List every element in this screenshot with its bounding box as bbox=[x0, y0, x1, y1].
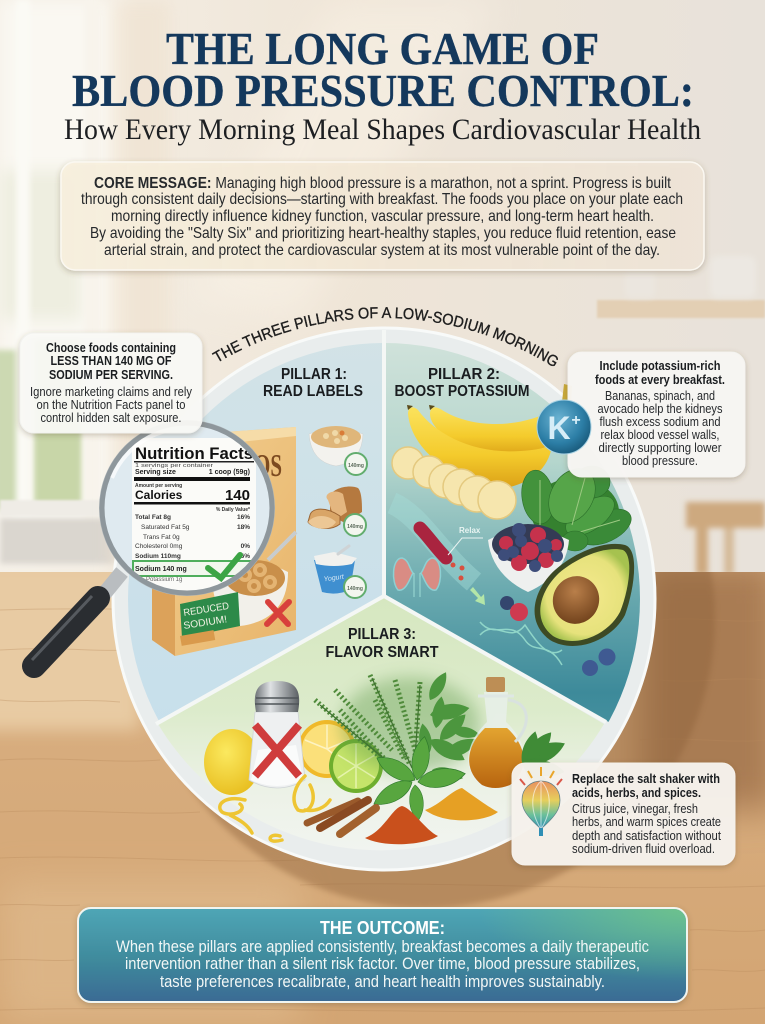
pillar 1 heading: READ LABELS bbox=[263, 383, 363, 400]
nutrition facts label: 1 servings per container bbox=[135, 463, 213, 469]
callout: flavor smart: herbs, and warm spices create bbox=[572, 815, 721, 829]
nutrition facts label: 16% bbox=[237, 514, 250, 521]
food: lemon bbox=[204, 729, 260, 795]
pillar 2 heading bbox=[394, 366, 530, 400]
food: berry bowl bbox=[488, 523, 569, 592]
callout: boost potassium: foods at every breakfast. bbox=[595, 373, 725, 387]
nutrition facts label: 0% bbox=[241, 543, 250, 550]
food: yogurt cup bbox=[314, 546, 357, 594]
pillar 1 heading bbox=[263, 366, 363, 400]
callout: read labels: control hidden salt exposure. bbox=[40, 411, 182, 425]
title bbox=[72, 23, 694, 116]
callout: read labels: LESS THAN 140 MG OF bbox=[50, 354, 172, 368]
nutrition facts label: Amount per serving bbox=[135, 483, 182, 489]
nutrition facts label: Calories bbox=[135, 488, 183, 502]
callout: boost potassium bbox=[568, 352, 745, 477]
nutrition facts label: Nutrition Facts bbox=[135, 445, 253, 463]
callout: read labels: Choose foods containing bbox=[46, 341, 176, 355]
nutrition facts label: 140 bbox=[225, 487, 250, 504]
food: lemon peel curls bbox=[220, 776, 330, 841]
food: bread loaf bbox=[308, 486, 362, 529]
outcome text bbox=[116, 938, 649, 991]
callout: flavor smart: Replace the salt shaker with bbox=[572, 772, 720, 786]
callout: read labels bbox=[20, 333, 202, 433]
shelf bbox=[597, 300, 765, 318]
panel: core message: CORE MESSAGE: Managing high blood pressure is a marathon, not a sprint. Progress is built bbox=[94, 175, 671, 192]
nutrition facts label: 6% bbox=[241, 553, 250, 560]
food: fresh herbs bbox=[315, 669, 480, 821]
food: lemon slice bbox=[298, 720, 356, 778]
pillar 3 heading: PILLAR 3: bbox=[348, 626, 416, 643]
food: lime bbox=[329, 739, 383, 793]
badge: bread sodium bbox=[344, 514, 366, 536]
outcome text: When these pillars are applied consistently, breakfast becomes a daily therapeutic bbox=[116, 938, 649, 956]
DNA strand bbox=[480, 622, 562, 665]
callout: boost potassium: blood pressure. bbox=[622, 454, 698, 468]
icon: vessel balloon with sparks bbox=[520, 767, 562, 836]
food: oatmeal bowl bbox=[309, 426, 363, 466]
title: BLOOD PRESSURE CONTROL: bbox=[72, 65, 694, 116]
badge: oatmeal sodium bbox=[345, 453, 367, 475]
loose berries bbox=[500, 596, 616, 676]
nutrition facts label: Trans Fat 0g bbox=[143, 534, 180, 541]
pillar 3 heading: FLAVOR SMART bbox=[326, 644, 439, 661]
plate segment: pillar 3 bbox=[158, 596, 604, 850]
red cross on box bbox=[267, 602, 289, 624]
callout: boost potassium: avocado help the kidneys bbox=[598, 402, 722, 416]
callout: flavor smart: sodium-driven fluid overload. bbox=[572, 842, 715, 856]
background: sunlit kitchen wall and window bbox=[0, 0, 765, 600]
food: banana slices bbox=[392, 447, 516, 519]
reduced sodium badge bbox=[180, 592, 240, 638]
food: parsley bbox=[518, 728, 568, 793]
callout: boost potassium: Bananas, spinach, and bbox=[605, 389, 715, 403]
food: oil bottle bbox=[468, 677, 526, 790]
pillar 2 heading: BOOST POTASSIUM bbox=[394, 383, 530, 400]
title: THE LONG GAME OF bbox=[166, 23, 599, 74]
food: paprika pile bbox=[365, 806, 438, 844]
outcome text: intervention rather than a silent risk factor. Over time, blood pressure stabilizes, bbox=[125, 955, 640, 973]
plate segment: pillar 1 bbox=[128, 343, 382, 720]
food: bananas bbox=[407, 384, 572, 487]
vessel illustration: Relax bbox=[459, 526, 481, 535]
reduced sodium badge: SODIUM! bbox=[183, 614, 228, 632]
nutrition facts label bbox=[132, 438, 256, 598]
food: yogurt cup: Yogurt bbox=[323, 573, 345, 583]
wooden table bbox=[0, 560, 765, 1024]
nutrition facts label: Potassium 1g bbox=[146, 577, 182, 583]
nutrition facts label: Sodium 110mg bbox=[135, 553, 181, 560]
nutrition facts label: Cholesterol 0mg bbox=[135, 543, 183, 550]
food: spinach bbox=[518, 460, 637, 552]
callout: read labels: on the Nutrition Facts panel to bbox=[36, 398, 186, 412]
callout: boost potassium: Include potassium-rich bbox=[600, 359, 720, 373]
food: turmeric pile bbox=[425, 788, 498, 820]
icon: potassium K+: K bbox=[547, 410, 571, 446]
nutrition facts label: 18% bbox=[237, 524, 250, 531]
cereal box: OS bbox=[254, 447, 282, 483]
callout: flavor smart bbox=[512, 763, 735, 865]
panel: the outcome bbox=[78, 908, 687, 1002]
plate bbox=[112, 326, 656, 872]
plate segment: pillar 2 bbox=[386, 343, 640, 722]
pillar 2 heading: PILLAR 2: bbox=[428, 366, 500, 383]
basil bbox=[370, 735, 467, 821]
panel: core message: By avoiding the "Salty Six" and prioritizing heart-healthy staples, you reduce fluid retention, ease bbox=[90, 225, 676, 242]
panel: core message bbox=[61, 162, 704, 270]
callout: flavor smart: depth and satisfaction without bbox=[572, 829, 721, 843]
chair bbox=[686, 502, 765, 575]
callout: flavor smart: Citrus juice, vinegar, fresh bbox=[572, 802, 698, 816]
callout: read labels: Ignore marketing claims and rely bbox=[30, 385, 193, 399]
cereal bowl bbox=[212, 532, 296, 626]
food: salt shaker with red cross bbox=[249, 681, 305, 788]
outcome heading: THE OUTCOME: bbox=[320, 917, 445, 938]
nutrition facts label: Serving size bbox=[135, 469, 176, 476]
nutrition facts label: Total Fat 8g bbox=[135, 514, 171, 521]
badge: bread sodium: 140mg bbox=[347, 524, 363, 530]
reduced sodium badge: REDUCED bbox=[183, 601, 230, 619]
callout: boost potassium: relax blood vessel walls, bbox=[600, 428, 720, 442]
handle bbox=[32, 572, 122, 666]
cereal box bbox=[152, 427, 296, 656]
food: avocado bbox=[535, 544, 634, 646]
callout: boost potassium: flush excess sodium and bbox=[600, 415, 721, 429]
subtitle: How Every Morning Meal Shapes Cardiovascular Health bbox=[64, 113, 701, 146]
panel: core message: through consistent daily decisions—starting with breakfast. The foods you place on your plate each bbox=[81, 191, 683, 208]
panel: core message: morning directly influence kidney function, vascular pressure, and long-term heart health. bbox=[111, 208, 654, 225]
magnifying glass bbox=[32, 420, 275, 666]
plate shadow bbox=[190, 572, 714, 907]
nutrition facts label: 1 coop (59g) bbox=[209, 469, 250, 476]
nutrition facts label: Saturated Fat 5g bbox=[141, 524, 190, 531]
callout: read labels: SODIUM PER SERVING. bbox=[49, 368, 173, 382]
pillar 1 heading: PILLAR 1: bbox=[281, 366, 347, 383]
outcome text: taste preferences recalibrate, and heart health improves sustainably. bbox=[160, 973, 605, 991]
nutrition facts label: % Daily Value* bbox=[216, 507, 250, 513]
badge: yogurt sodium bbox=[344, 576, 366, 598]
icon: potassium K+: + bbox=[571, 412, 581, 429]
vessel illustration bbox=[392, 503, 485, 605]
callout: boost potassium: directly supporting lower bbox=[598, 441, 722, 455]
callout: flavor smart: acids, herbs, and spices. bbox=[572, 786, 701, 800]
badge: yogurt sodium: 140mg bbox=[347, 586, 363, 592]
pillar 3 heading bbox=[326, 626, 439, 661]
icon: potassium K+ bbox=[537, 400, 591, 454]
food: cinnamon sticks bbox=[307, 800, 376, 834]
kidneys bbox=[393, 558, 441, 597]
panel: core message: arterial strain, and protect the cardiovascular system at its most vulnerable point of the day. bbox=[104, 242, 660, 259]
badge: oatmeal sodium: 140mg bbox=[348, 463, 364, 469]
nutrition facts label: Sodium 140 mg bbox=[135, 566, 187, 573]
curved heading: three pillars: THE THREE PILLARS OF A LOW-SODIUM MORNING bbox=[212, 307, 558, 366]
